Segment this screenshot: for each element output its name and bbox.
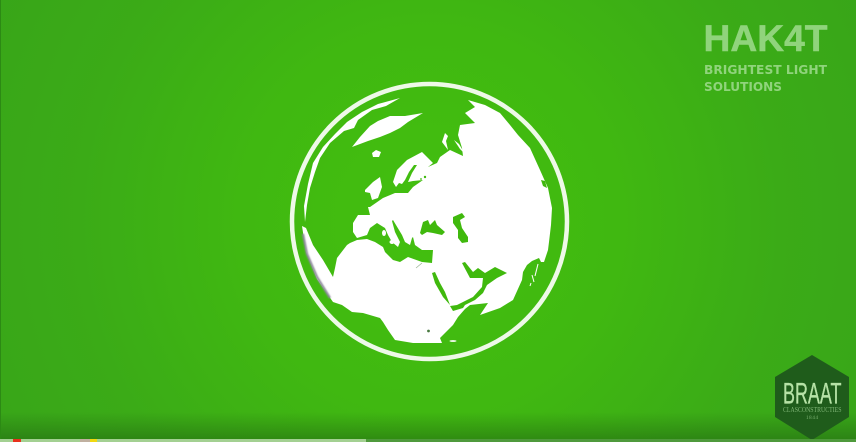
- continent shadow: [303, 234, 330, 298]
- tagline: SOLUTIONS: [704, 80, 782, 94]
- seas cut out of the land: [420, 176, 547, 311]
- logo: BRAAT hexagon: 1844: [806, 416, 818, 421]
- globe: [292, 84, 567, 359]
- East Asian notch: [541, 180, 547, 188]
- Madagascar: [450, 340, 456, 342]
- Gulf of Finland dots: [424, 176, 426, 178]
- Caspian Sea: [453, 213, 468, 243]
- brand heading: HAK4T: HAK4T: [704, 18, 828, 59]
- land: Britain and Ireland: [365, 177, 382, 200]
- land: North America and Greenland: [304, 98, 423, 222]
- logo: BRAAT hexagon: CLASCONSTRUCTIES: [783, 406, 842, 414]
- Persian Gulf and Arabian Sea: [450, 262, 507, 311]
- Southeast Asia island streaks: [530, 264, 538, 286]
- Black Sea: [420, 220, 445, 235]
- Mediterranean islands: [382, 230, 394, 244]
- Red Sea: [432, 272, 450, 305]
- tagline: BRIGHTEST LIGHT: [704, 63, 828, 77]
- land: Europe, Asia and Africa: [302, 100, 552, 343]
- tagline: [704, 63, 828, 94]
- globe outer ring: [292, 84, 567, 359]
- brand heading: HAK4T: [704, 18, 828, 94]
- land: Novaya Zemlya and Arctic streaks: [442, 133, 465, 154]
- logo: BRAAT hexagon: [775, 355, 849, 440]
- video progress bar: [0, 439, 856, 442]
- Nile line: [416, 263, 422, 268]
- lake dot: [427, 330, 430, 332]
